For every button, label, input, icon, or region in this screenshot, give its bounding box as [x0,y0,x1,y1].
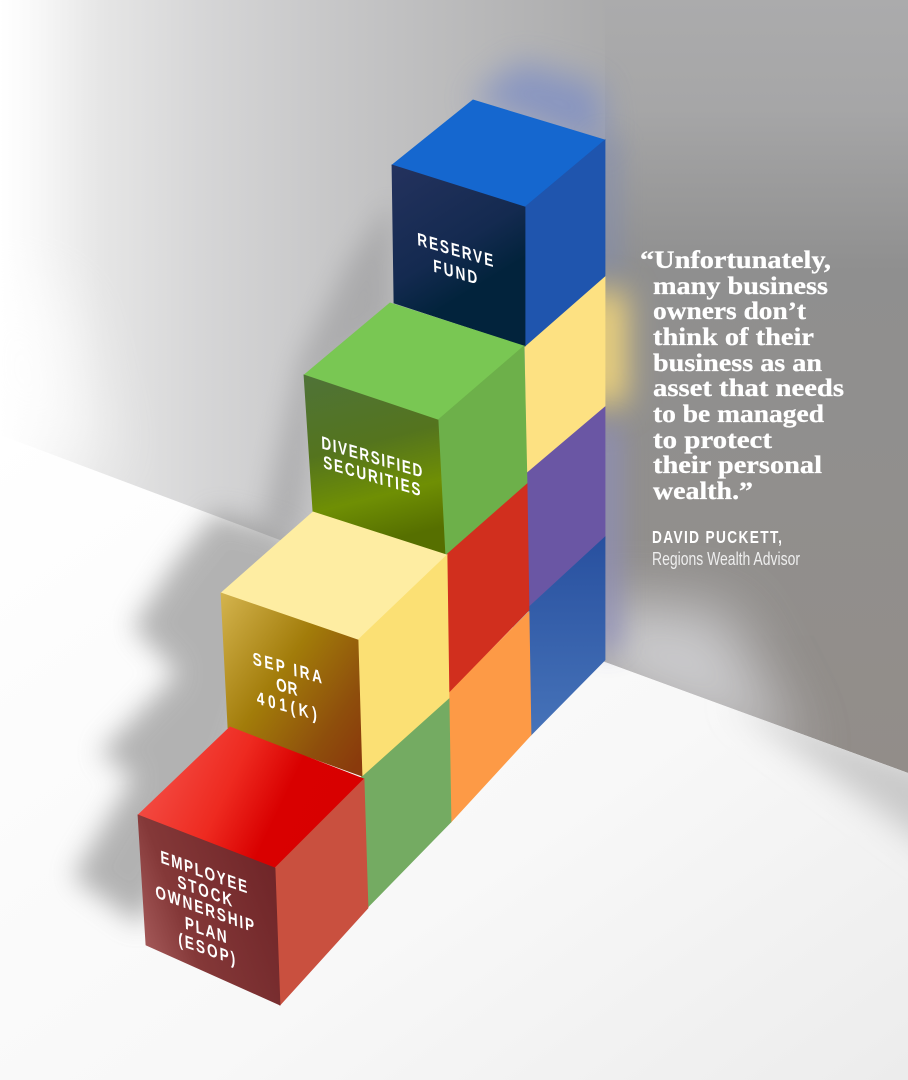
pull quote: to protect [653,427,773,454]
glow: blue above top cube [470,62,605,150]
attribution [652,528,800,569]
wall shadow beside top cubes [262,200,392,535]
glow: yellow right of column [590,292,624,404]
label: ESOP: EMPLOYEE [160,847,248,898]
left wall [0,0,606,663]
block: SEP IRA or 401(k) [221,512,449,776]
pull quote: wealth.” [653,478,753,505]
face: red [447,483,529,692]
glow: blue right of top cube [596,140,618,275]
pull quote: owners don’t [653,298,807,325]
label: SEP IRA or 401(k): SEP IRA [252,649,323,688]
face: purple [527,407,605,607]
floor [115,478,908,1080]
pull quote [640,247,844,505]
label: diversified securities: DIVERSIFIED [321,433,423,482]
pull quote: “Unfortunately, [640,247,831,274]
face: yellow [525,275,605,473]
pull quote: to be managed [653,401,824,428]
label: diversified securities: SECURITIES [323,452,421,501]
label: reserve fund: RESERVE [417,229,494,271]
right wall [590,0,908,773]
label: ESOP: STOCK [177,872,233,911]
cast shadows on floor [73,512,300,925]
label: SEP IRA or 401(k): OR [276,675,298,700]
label: ESOP [155,847,255,970]
glow: purple and blue right of column [596,425,620,650]
block: reserve fund [392,100,605,346]
block: ESOP [138,727,368,1005]
block: diversified securities [304,303,527,555]
label: ESOP: (ESOP) [178,929,236,970]
label: ESOP: PLAN [184,913,227,948]
pull quote: think of their [653,324,814,351]
label: ESOP: OWNERSHIP [155,882,255,937]
face: orange [449,612,531,822]
face: lower blue [529,537,605,735]
label: reserve fund: FUND [433,256,478,289]
attribution: Regions Wealth Advisor [652,549,800,569]
pull quote: many business [653,273,828,300]
pull quote: business as an [653,350,822,377]
label: SEP IRA or 401(k): 401(K) [256,688,317,725]
pull quote: their personal [653,452,822,479]
label: SEP IRA or 401(k) [252,649,323,725]
pull quote: asset that needs [653,375,844,402]
face: lower green [360,698,451,908]
block column: rear stacked faces [360,275,605,908]
attribution: DAVID PUCKETT, [652,528,782,548]
